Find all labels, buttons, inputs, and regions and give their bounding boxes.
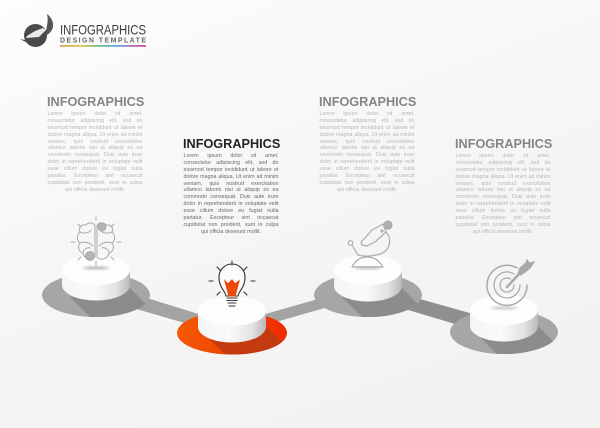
text block: step 4: veniam, quis nostrud exercitation <box>456 180 550 186</box>
text block: step 1: ullamco laboris nisi ut aliquip ex ea <box>48 145 142 151</box>
text block: step 4: pariatur. Excepteur sint occaecat <box>456 215 550 221</box>
text block: step 4: Lorem ipsum dolor sit amet, <box>456 153 550 159</box>
rainbow bar <box>60 45 146 47</box>
text block: step 2: dolor in reprehenderit in voluptate velit <box>184 201 278 207</box>
text block: step 3: cupidatat non proident, sunt in culpa <box>320 180 414 186</box>
text block: step 1: qui officia deserunt mollit. <box>65 187 125 193</box>
connector: step 1 to step 2 <box>133 298 205 329</box>
text block: step 2: commodo consequat. Duis aute irure <box>184 194 278 200</box>
text block: step 2: veniam, quis nostrud exercitation <box>184 180 278 186</box>
text block: step 1: Lorem ipsum dolor sit amet, <box>48 111 142 117</box>
connector: step 2 to step 3 <box>262 297 335 326</box>
text block: step 1: cupidatat non proident, sunt in culpa <box>48 180 142 186</box>
text block: step 4: esse cillum dolore eu fugiat nulla <box>456 208 550 214</box>
text block: step 3: ullamco laboris nisi ut aliquip ex ea <box>320 145 414 151</box>
logo title: INFOGRAPHICS <box>60 22 146 38</box>
text block: step 3: Lorem ipsum dolor sit amet, <box>320 111 414 117</box>
text block: step 3: esse cillum dolore eu fugiat nulla <box>320 166 414 172</box>
step 1 disc <box>42 266 150 317</box>
text block: step 3: dolore magna aliqua. Ut enim ad minim <box>320 132 414 138</box>
text block: step 4: dolor in reprehenderit in voluptate velit <box>456 201 550 207</box>
text block: step 3: veniam, quis nostrud exercitation <box>320 138 414 144</box>
text block: step 3: dolor in reprehenderit in voluptate velit <box>320 159 414 165</box>
text block: step 3: consectetur adipiscing elit, sed do <box>320 118 414 124</box>
text block: step 2: eiusmod tempor incididunt ut labore et <box>184 167 278 173</box>
text block: step 1: INFOGRAPHICS <box>47 94 144 108</box>
text block: step 1: commodo consequat. Duis aute irure <box>48 152 142 158</box>
text block: step 1: dolor in reprehenderit in voluptate velit <box>48 159 142 165</box>
text block: step 4: INFOGRAPHICS <box>455 136 552 150</box>
icon: target with arrow <box>487 260 534 305</box>
text block: step 3: INFOGRAPHICS <box>319 94 416 108</box>
step 3 disc <box>314 255 422 317</box>
text block: step 2: qui officia deserunt mollit. <box>201 229 261 235</box>
text block: step 1: veniam, quis nostrud exercitation <box>48 138 142 144</box>
logo subtitle: DESIGN TEMPLATE <box>60 37 146 44</box>
text block: step 2 <box>183 136 280 235</box>
icon: microscope <box>348 221 392 267</box>
text block: step 3: qui officia deserunt mollit. <box>337 187 397 193</box>
text block: step 1: esse cillum dolore eu fugiat nulla <box>48 166 142 172</box>
text block: step 1: consectetur adipiscing elit, sed do <box>48 118 142 124</box>
text block: step 2: cupidatat non proident, sunt in culpa <box>184 222 278 228</box>
text block: step 2: pariatur. Excepteur sint occaecat <box>184 215 278 221</box>
text block: step 2: consectetur adipiscing elit, sed do <box>184 160 278 166</box>
text block: step 1: pariatur. Excepteur sint occaecat <box>48 173 142 179</box>
text block: step 3 <box>319 94 416 193</box>
logo mark <box>20 14 53 47</box>
text block: step 2: INFOGRAPHICS <box>183 136 280 150</box>
text block: step 4: dolore magna aliqua. Ut enim ad minim <box>456 174 550 180</box>
text block: step 1: dolore magna aliqua. Ut enim ad minim <box>48 132 142 138</box>
text block: step 3: eiusmod tempor incididunt ut labore et <box>320 125 414 131</box>
icon: brain <box>71 217 121 265</box>
infographic path diagram <box>20 14 558 354</box>
text block: step 4 <box>455 136 552 235</box>
text block: step 2: dolore magna aliqua. Ut enim ad minim <box>184 174 278 180</box>
text block: step 4: commodo consequat. Duis aute irure <box>456 194 550 200</box>
step 4 disc <box>450 295 558 354</box>
text block: step 1 <box>47 94 144 193</box>
text block: step 2: ullamco laboris nisi ut aliquip ex ea <box>184 187 278 193</box>
text block: step 4: consectetur adipiscing elit, sed do <box>456 160 550 166</box>
text block: step 4: cupidatat non proident, sunt in culpa <box>456 222 550 228</box>
text block: step 4: eiusmod tempor incididunt ut labore et <box>456 167 550 173</box>
text block: step 2: esse cillum dolore eu fugiat nulla <box>184 208 278 214</box>
text block: step 4: qui officia deserunt mollit. <box>473 229 533 235</box>
text block: step 2: Lorem ipsum dolor sit amet, <box>184 153 278 159</box>
text block: step 3: pariatur. Excepteur sint occaecat <box>320 173 414 179</box>
text block: step 3: commodo consequat. Duis aute irure <box>320 152 414 158</box>
step 2 disc (active, orange) <box>177 296 287 354</box>
text block: step 1: eiusmod tempor incididunt ut labore et <box>48 125 142 131</box>
icon: light bulb <box>209 261 255 306</box>
text block: step 4: ullamco laboris nisi ut aliquip ex ea <box>456 187 550 193</box>
logo <box>20 14 146 47</box>
connector: step 3 to step 4 <box>395 292 475 330</box>
